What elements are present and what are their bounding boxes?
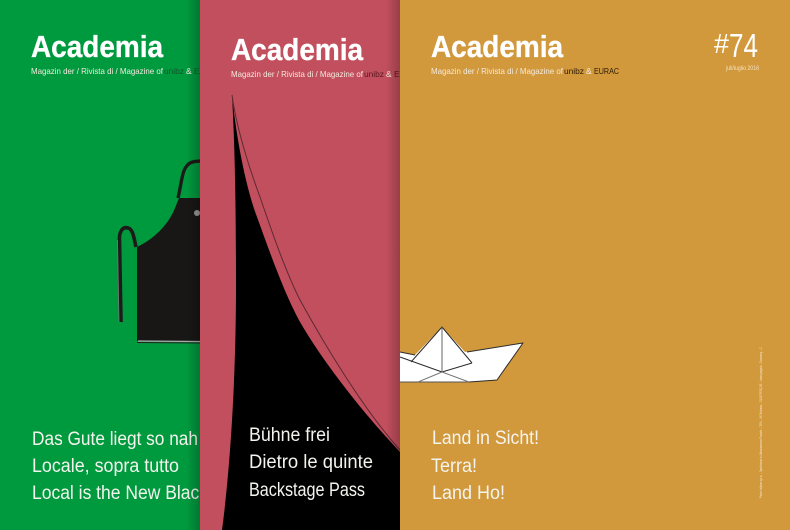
subtitle: orange cover: & (586, 66, 592, 76)
subtitle: green cover (32, 68, 200, 76)
subtitle: pink cover: & (386, 69, 392, 79)
headline lines: orange cover: Land Ho! (432, 483, 505, 504)
subtitle: orange cover: EURAC (594, 66, 619, 76)
headline lines: pink cover: Backstage Pass (249, 480, 365, 501)
vertical postal text: Poste Italiane s.p.a. – Spedizione in Abbonamento Postale – 70% – NE Bolzano – TAXE PERÇUE – tassa pagata – Economy – C (759, 347, 763, 498)
issue date: juli/luglio 2016 (725, 66, 760, 72)
subtitle: green cover: Magazin der / Rivista di / Magazine of (31, 66, 164, 76)
headline lines: green cover: Local is the New Black (32, 483, 208, 504)
title: Academia green cover: Academia (31, 29, 164, 64)
panel: pink cover (200, 0, 400, 530)
issue number (714, 27, 758, 64)
subtitle: green cover: unibz (164, 66, 184, 76)
subtitle: pink cover: unibz (364, 69, 384, 79)
title: Academia pink cover: Academia (231, 32, 364, 67)
subtitle: orange cover: unibz (564, 66, 584, 76)
headline lines: green cover: Das Gute liegt so nah (32, 429, 198, 450)
icon: paper boat (400, 327, 523, 382)
icon: black apron (118, 161, 205, 343)
panel: green cover (0, 0, 200, 530)
subtitle: green cover: & (186, 66, 192, 76)
panel: orange cover (400, 0, 790, 530)
headline lines: orange cover: Land in Sicht! (432, 428, 539, 449)
headline lines: pink cover: Dietro le quinte (249, 452, 373, 473)
headline lines: green cover (33, 431, 199, 499)
illustration: black stage curtain (222, 95, 400, 530)
title: Academia orange cover: Academia (431, 29, 564, 64)
subtitle: pink cover: EURAC (394, 69, 424, 79)
subtitle: pink cover: Magazin der / Rivista di / Magazine of (231, 69, 364, 79)
headline lines: green cover: Locale, sopra tutto (32, 456, 179, 477)
headline lines: pink cover: Bühne frei (249, 425, 330, 446)
headline lines: pink cover (249, 425, 373, 501)
icon: apron emblem (194, 210, 200, 216)
headline lines: orange cover: Terra! (431, 456, 477, 477)
subtitle: pink cover (232, 71, 400, 78)
issue number: 74 (729, 27, 758, 64)
issue number: # (714, 28, 729, 59)
subtitle: orange cover: Magazin der / Rivista di / Magazine of (431, 66, 564, 76)
headline lines: orange cover (431, 428, 539, 504)
subtitle: green cover: EURAC (194, 66, 224, 76)
